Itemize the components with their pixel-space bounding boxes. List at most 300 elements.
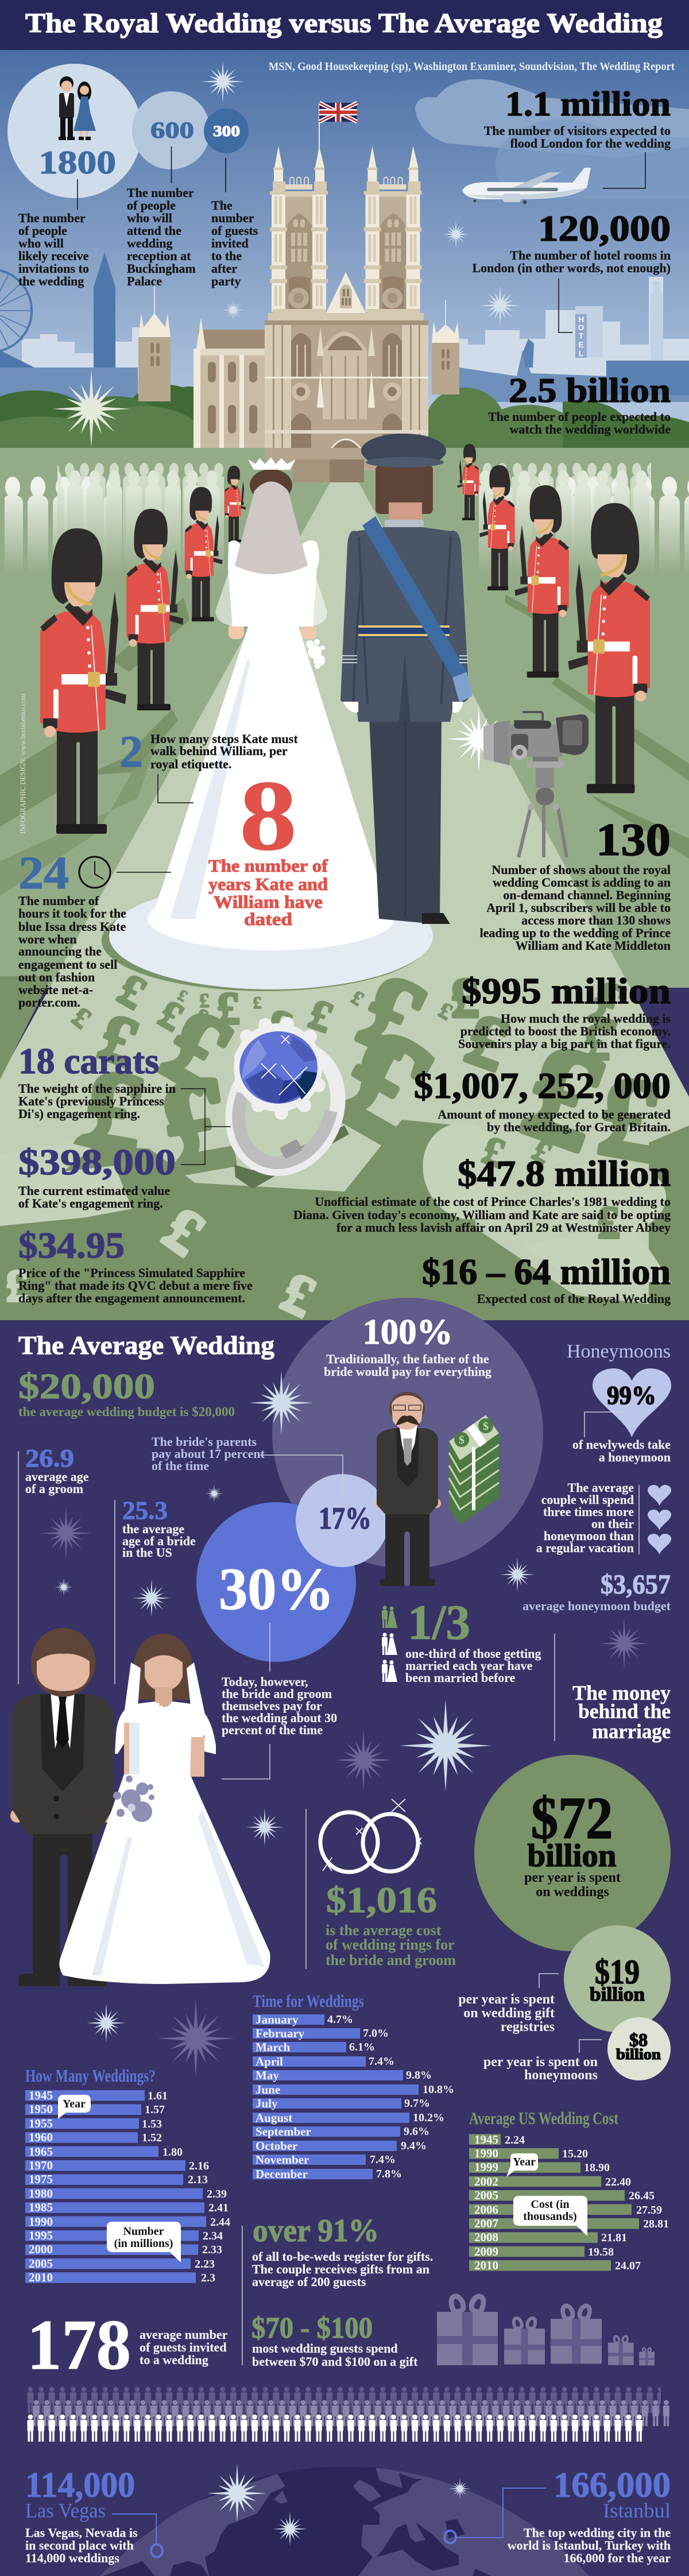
bar chart: average US wedding cost: 24.07 <box>615 2260 641 2272</box>
text: 8 years dated: dated <box>244 909 292 929</box>
bar chart: time for weddings: 6.1% <box>349 2041 375 2053</box>
title banner: The Royal Wedding versus The Average Wedding <box>25 8 663 38</box>
text: honeymoon budget <box>522 1569 671 1613</box>
panel: lower money pattern: £ <box>477 1128 510 1177</box>
callout line: $8 <box>579 2040 602 2053</box>
circle: 300 after party guests: 300 <box>213 123 240 140</box>
starburst over trees <box>52 370 130 448</box>
text: 24 hours: website net-a- <box>18 983 93 997</box>
bar chart: average US wedding cost: 21.81 <box>601 2231 627 2244</box>
panel: lower money pattern: £ <box>192 1004 212 1028</box>
icons: gift boxes <box>437 2296 655 2365</box>
text: Las Vegas: Las Vegas, Nevada is <box>25 2525 138 2540</box>
starbursts over globe <box>207 2463 471 2546</box>
bar chart: time for weddings: April <box>256 2055 283 2068</box>
text: 178 guests: 178 <box>27 2306 131 2384</box>
bar chart: time for weddings: October <box>256 2139 297 2153</box>
icon: HOTEL vertical sign: L <box>579 349 584 358</box>
text: Istanbul: Istanbul <box>603 2499 671 2522</box>
text: over 91 percent: over 91% <box>253 2213 379 2249</box>
text: 24 hours: out on fashion <box>18 970 95 984</box>
text: 2 steps behind: 2 <box>119 726 143 776</box>
text: 24 hours: The number of <box>18 894 99 908</box>
panel: lower money pattern: £ <box>343 950 443 1082</box>
text: 300 description: party <box>211 274 241 288</box>
bar chart: time for weddings: March <box>256 2040 291 2054</box>
heading: the average wedding: The Average Wedding <box>18 1330 274 1360</box>
pictogram: rows of guests <box>25 2387 672 2442</box>
text: 120,000 hotel rooms: London (in other words, not enough) <box>472 261 671 275</box>
text: 300 description: after <box>211 261 237 276</box>
divider: rings <box>305 1809 307 1969</box>
text: bride's parents 17 percent: pay about 17 percent <box>152 1446 265 1461</box>
bar chart: time for weddings: 9.4% <box>401 2140 427 2152</box>
circle: $72 billion <box>474 1755 671 1951</box>
bar chart: average US wedding cost: 2.24 <box>505 2134 525 2146</box>
text: 8 years dated: 8 <box>239 760 297 871</box>
text: $34.95: Price of the "Princess Simulated Sapphire <box>18 1266 245 1280</box>
text: 1800 description: The number <box>18 211 86 225</box>
text: $1,007,252,000: $1,007, 252, 000 <box>414 1065 671 1106</box>
text: 130 shows: William and Kate Middleton <box>516 938 671 953</box>
text: $70 - $100 gift <box>251 2312 418 2369</box>
text: $47.8 million: Unofficial estimate of the cost of Prince Charles's 1981 wedding to <box>315 1194 671 1209</box>
callout bubble: number in millions: (in millions) <box>114 2237 173 2250</box>
callout lines from circles <box>78 146 226 210</box>
text: bride age: 25.3 <box>122 1496 168 1525</box>
bar chart: how many weddings: 1.80 <box>162 2146 183 2159</box>
guard: left second <box>126 509 183 710</box>
bar chart: how many weddings: 1950 <box>29 2102 53 2116</box>
text: 100 percent: 100% <box>363 1313 452 1352</box>
callout line: $19 <box>539 1974 559 1988</box>
bar chart: average US wedding cost: Average US Wedding Cost <box>469 2108 619 2128</box>
bar chart: how many weddings: 1990 <box>29 2215 53 2229</box>
circle: $8 billion: billion <box>616 2046 661 2063</box>
guard: left third <box>185 487 223 621</box>
bar chart: how many weddings: How Many Weddings? <box>25 2066 156 2086</box>
text: 18 carats: The weight of the sapphire in <box>18 1081 176 1096</box>
text: 130 shows: April 1, subscribers will be able to <box>486 900 671 915</box>
text: over 91 percent <box>252 2213 433 2289</box>
text: 2.5 billion viewers: watch the wedding worldwide <box>509 422 671 436</box>
bar chart: time for weddings: January <box>256 2013 299 2026</box>
text: newlyweds: of newlyweds take <box>572 1437 671 1452</box>
text: couple pays 30 percent: Today, however, <box>222 1674 308 1689</box>
text: couple pays 30 percent: percent of the time <box>222 1723 323 1737</box>
panel: lower money pattern: £ <box>451 966 479 1030</box>
bar chart: how many weddings: 1995 <box>29 2229 53 2242</box>
icon: stack of money: $ <box>459 1434 465 1446</box>
text: 300 description: of guests <box>211 223 258 238</box>
panel: lower money pattern: £ <box>75 1045 154 1179</box>
text: 600 description: reception at <box>127 249 191 263</box>
text: gift registries <box>458 1992 555 2035</box>
bar chart: how many weddings: 2.16 <box>189 2160 209 2172</box>
callout bracket: ring <box>181 1089 231 1165</box>
bar chart: time for weddings: 7.4% <box>370 2153 396 2166</box>
text: honeymoon budget: average honeymoon budget <box>522 1599 671 1613</box>
illustration: groom from behind <box>340 434 473 924</box>
text: 2 steps behind <box>119 726 298 776</box>
text: 100 percent <box>324 1313 491 1379</box>
text: 18 carats: 18 carats <box>18 1041 159 1081</box>
panel: lower money pattern: £ <box>597 1198 620 1248</box>
bar chart: how many weddings: 1.61 <box>148 2090 168 2102</box>
panel: lower money pattern: £ <box>47 1108 129 1226</box>
circle: $72 billion: per year is spent <box>524 1870 621 1885</box>
panel: lower money pattern: £ <box>253 993 262 1012</box>
left side wing <box>193 318 265 450</box>
bar chart: average US wedding cost: 15.20 <box>562 2148 588 2160</box>
panel: lower money pattern: £ <box>110 964 154 1019</box>
credit: designer: INFOGRAPHIC DESIGN: www.borisbenko.com <box>18 694 27 834</box>
callout bubble: cost in thousands <box>513 2196 587 2236</box>
illustration: average bride <box>59 1634 270 1984</box>
text: gift registries: on wedding gift <box>463 2006 555 2021</box>
text: 100 percent: Traditionally, the father of the <box>326 1352 489 1366</box>
callout line: below 30 percent text <box>222 1744 270 1779</box>
icon: clock <box>79 857 110 888</box>
text: 24 hours: blue Issa dress Kate <box>18 919 126 934</box>
bar chart: average US wedding cost: 19.58 <box>588 2246 614 2258</box>
panel: lower money pattern: £ <box>506 1013 623 1180</box>
text: 24 hours: announcing the <box>18 944 102 958</box>
panel: lower money pattern: £ <box>144 985 251 1117</box>
heading: the money behind the marriage: marriage <box>592 1720 671 1743</box>
bar chart: how many weddings: 2.34 <box>203 2230 223 2242</box>
icon: bride's bouquet <box>113 1776 154 1822</box>
text: $70 - $100 gift: $70 - $100 <box>251 2312 373 2345</box>
text: 18 carats: Di's) engagement ring. <box>18 1107 140 1121</box>
bar chart: average US wedding cost: 2007 <box>474 2217 498 2230</box>
panel: lower money pattern: £ <box>6 1261 29 1312</box>
text: 2 steps behind: walk behind William, per <box>150 744 288 758</box>
title banner <box>0 0 689 50</box>
panel: lower money pattern: £ <box>585 1014 610 1071</box>
panel: lower money pattern: £ <box>311 995 458 1175</box>
circle: $72 billion: on weddings <box>536 1885 609 1900</box>
text: Istanbul: The top wedding city in the <box>524 2525 671 2540</box>
text: 1800 description: likely receive <box>18 249 89 263</box>
text: cost of rings: is the average cost <box>326 1922 442 1939</box>
marker: Las Vegas <box>112 2514 162 2557</box>
circle: $19 billion: billion <box>590 1984 645 2005</box>
text: $1,007,252,000: Amount of money expected to be generated <box>438 1107 671 1121</box>
text: 2.5 billion viewers: The number of people expected to <box>488 409 671 424</box>
bar chart: time for weddings: May <box>256 2068 279 2082</box>
text: honeymoons spend <box>483 2055 598 2083</box>
callout bubble: number in millions: Number <box>123 2225 164 2238</box>
text: 2 steps behind: How many steps Kate must <box>150 732 298 746</box>
text: 178 guests: average number <box>140 2327 228 2342</box>
panel: lower money pattern: £ <box>527 1132 558 1171</box>
text: 600 description: attend the <box>127 223 181 238</box>
bar chart: how many weddings: 2005 <box>29 2257 53 2271</box>
text: 130 shows: wedding Comcast is adding to an <box>493 875 671 889</box>
icon: HOTEL vertical sign: E <box>578 340 584 349</box>
text: 1800 description: who will <box>18 236 64 250</box>
circle: 600 reception guests <box>132 91 210 169</box>
bar chart: time for weddings: February <box>256 2026 305 2040</box>
guard: far right <box>457 444 479 520</box>
panel: lower money pattern: £ <box>303 990 339 1042</box>
bar chart: time for weddings: December <box>256 2167 308 2181</box>
text: 1.1 million visitors <box>484 85 671 150</box>
guard shadows <box>0 594 689 896</box>
bar chart: how many weddings: 2000 <box>29 2242 53 2256</box>
panel: sky and London skyline <box>0 50 689 458</box>
bar chart: time for weddings: June <box>256 2083 280 2097</box>
text: groom age <box>25 1444 89 1496</box>
text: 8 years dated: The number of <box>208 856 328 876</box>
text: 24 hours <box>18 848 126 1009</box>
bar chart: how many weddings: 1980 <box>29 2187 53 2200</box>
text: 2 steps behind: royal etiquette. <box>150 757 231 771</box>
text: bride age: age of a bride <box>122 1534 196 1548</box>
icon: bouquet <box>306 639 325 669</box>
text: 1.1 million visitors: flood London for the wedding <box>510 136 671 150</box>
panel: lower money pattern: £ <box>582 966 635 1043</box>
text: three times more: honeymoon than <box>544 1529 634 1543</box>
callout bubble: cost in thousands: Cost (in <box>531 2198 570 2211</box>
text: $995 million <box>458 970 671 1051</box>
text: 300 description: The <box>211 198 233 212</box>
text: 2.5 billion viewers <box>488 372 671 436</box>
bar chart: how many weddings: 2.23 <box>195 2258 215 2271</box>
circle: $8 billion <box>607 2017 671 2080</box>
text: $70 - $100 gift: between $70 and $100 on a gift <box>252 2354 418 2369</box>
text: gift registries: registries <box>501 2020 555 2035</box>
icon: HOTEL vertical sign: O <box>578 323 585 332</box>
panel: lower money pattern <box>0 950 689 1329</box>
bar chart: how many weddings: 1975 <box>29 2172 53 2186</box>
circle: 300 after party guests <box>204 109 249 153</box>
bar chart: average US wedding cost: 2006 <box>474 2203 498 2217</box>
bar chart: time for weddings: Time for Weddings <box>253 1991 364 2011</box>
text: 600 description: Buckingham <box>127 261 196 276</box>
text: 600 description: of people <box>127 198 176 212</box>
text: 24 hours: 24 <box>18 848 69 899</box>
text: one-third remarried: married each year have <box>405 1658 533 1673</box>
icon: HOTEL vertical sign: H <box>578 315 584 324</box>
bar chart: how many weddings: 2010 <box>29 2271 53 2284</box>
panel: lower money pattern: £ <box>151 992 191 1041</box>
bar chart: how many weddings: 1.53 <box>142 2118 162 2130</box>
guard: right second <box>514 485 569 678</box>
text: 300 description: to the <box>211 249 242 263</box>
text: three times more: three times more <box>543 1504 634 1519</box>
circle: 600 reception guests: 600 <box>150 117 194 143</box>
callout bubble: year: Year <box>63 2098 86 2110</box>
text: $20,000 budget: $20,000 <box>18 1367 155 1406</box>
panel: lower money pattern: £ <box>272 1260 325 1329</box>
text: 18 carats <box>18 1041 176 1121</box>
text: couple pays 30 percent: themselves pay for <box>222 1699 322 1713</box>
panel: lower money pattern: £ <box>151 1193 217 1269</box>
icons: small couples <box>382 1606 397 1682</box>
text: bride's parents 17 percent: of the time <box>152 1459 209 1473</box>
text: 130 shows: leading up to the wedding of Prince <box>480 926 671 940</box>
divider: three times <box>638 1485 640 1554</box>
text: three times more: a regular vacation <box>536 1541 634 1555</box>
icon: stack of money <box>449 1415 499 1525</box>
circle: 30 percent couple pays: 30% <box>219 1556 334 1622</box>
guard: left front <box>40 528 126 834</box>
text: Istanbul: 166,000 <box>553 2466 671 2505</box>
text: 1.1 million visitors: The number of visitors expected to <box>484 123 671 138</box>
illustration: globe <box>100 2467 589 2576</box>
callout bubble: year <box>58 2095 91 2119</box>
illustration: bride from behind <box>102 457 433 991</box>
icon: stack of money: $ <box>483 1420 489 1433</box>
text: 120,000 hotel rooms: The number of hotel rooms in <box>510 248 671 262</box>
bar chart: how many weddings: 2.41 <box>208 2202 229 2214</box>
text: 178 guests: to a wedding <box>140 2353 208 2367</box>
bar chart: how many weddings: 1985 <box>29 2200 53 2214</box>
text: 300 description: number <box>211 211 254 225</box>
text: Istanbul <box>508 2466 671 2565</box>
text: $47.8 million: for a much less lavish affair on April 29 at Westminster Abbey <box>336 1220 671 1235</box>
divider lines: ages <box>18 1451 115 1684</box>
text: $34.95: days after the engagement announcement. <box>18 1291 245 1305</box>
text: $70 - $100 gift: most wedding guests spend <box>252 2341 398 2355</box>
text: 130 shows: on-demand channel. Beginning <box>503 888 671 902</box>
left small tower <box>138 285 171 401</box>
illustration: father of the bride <box>374 1392 441 1586</box>
bar chart: average US wedding cost: 18.90 <box>584 2161 610 2174</box>
icon: TV camera on tripod <box>446 706 589 857</box>
bar chart: average US wedding cost: 1945 <box>474 2133 498 2146</box>
bar chart: average US wedding cost: 28.81 <box>643 2218 669 2230</box>
icon: HOTEL vertical sign: T <box>579 331 584 341</box>
circle: 17 percent parents pay <box>296 1474 389 1567</box>
callout line: plane <box>603 152 645 188</box>
bar chart: average US wedding cost: 1990 <box>474 2146 498 2160</box>
bar chart: time for weddings: 10.8% <box>423 2083 454 2096</box>
text: $47.8 million <box>293 1153 671 1235</box>
text: $398,000: $398,000 <box>18 1142 176 1182</box>
text: $34.95: Ring" that made its QVC debut a mere five <box>18 1278 253 1293</box>
panel: the average wedding background <box>0 1320 689 2576</box>
illustration: crowds <box>5 463 689 566</box>
text: 130 shows: Number of shows about the royal <box>491 862 671 877</box>
bar chart: how many weddings: 1945 <box>29 2088 53 2102</box>
text: 300 description: invited <box>211 236 249 250</box>
icon: wedding rings <box>320 1799 421 1872</box>
panel: lower money pattern: £ <box>260 999 299 1054</box>
panel: lower money pattern: £ <box>434 997 457 1025</box>
text: Las Vegas <box>25 2466 138 2565</box>
panel: lower money pattern: £ <box>175 987 191 1005</box>
circle: $72 billion: billion <box>527 1838 617 1874</box>
text: couple pays 30 percent: the wedding about 30 <box>222 1711 337 1725</box>
bar chart: time for weddings: 9.7% <box>404 2097 430 2110</box>
text: three times more: The average <box>568 1480 634 1495</box>
text: 100 percent: bride would pay for everything <box>324 1364 491 1379</box>
divider: gifts <box>242 2226 243 2365</box>
callout line: 30 percent <box>269 1623 270 1672</box>
text: newlyweds: a honeymoon <box>599 1450 671 1464</box>
text: $995 million: $995 million <box>462 970 671 1011</box>
marker: Istanbul <box>444 2488 546 2543</box>
bar chart: time for weddings: 10.2% <box>413 2111 444 2124</box>
text: 178 guests <box>27 2306 228 2384</box>
panel: lower money pattern: £ <box>456 997 519 1088</box>
guard: right front <box>568 503 650 793</box>
circle: 17 percent parents pay: 17% <box>319 1501 371 1535</box>
panel: lower money pattern: £ <box>152 1047 243 1202</box>
text: one-third remarried: been married before <box>405 1670 516 1685</box>
text: one-third remarried <box>405 1595 541 1685</box>
bar chart: how many weddings: 1970 <box>29 2159 53 2172</box>
callout line: 2 steps <box>158 774 193 803</box>
illustration: trees behind abbey <box>0 385 689 473</box>
text: Las Vegas: in second place with <box>25 2538 134 2552</box>
bar chart: time for weddings: 7.8% <box>376 2168 402 2180</box>
text: over 91 percent: average of 200 guests <box>252 2275 366 2289</box>
circle: 100 percent father <box>272 1298 543 1569</box>
bar chart: time for weddings: 7.0% <box>363 2027 389 2040</box>
bar chart: how many weddings: 2.33 <box>202 2244 222 2256</box>
text: 24 hours: wore when <box>18 932 77 946</box>
main facade <box>265 313 428 459</box>
bar chart: how many weddings: 2.3 <box>201 2272 215 2284</box>
bar chart: how many weddings: 1.57 <box>145 2103 165 2116</box>
text: 120,000 hotel rooms <box>472 208 671 275</box>
divider: money <box>554 1634 555 1741</box>
text: couple pays 30 percent: the bride and groom <box>222 1687 332 1701</box>
bar chart: time for weddings: 9.6% <box>404 2125 429 2138</box>
text: 600 description: The number <box>127 185 194 200</box>
text: Las Vegas: 114,000 <box>25 2466 135 2505</box>
illustration: Westminster Abbey <box>138 146 459 459</box>
panel: lower money pattern: £ <box>217 984 240 1034</box>
text: 24 hours: engagement to sell <box>18 957 117 972</box>
text: 1.1 million visitors: 1.1 million <box>505 85 671 123</box>
text: 1800 description: of people <box>18 223 67 238</box>
bar chart: time for weddings: 4.7% <box>327 2013 353 2026</box>
sky starbursts <box>202 60 521 326</box>
text: $1,007,252,000 <box>414 1065 671 1134</box>
text: one-third remarried: 1/3 <box>408 1595 470 1650</box>
panel: lower money pattern: £ <box>591 1051 669 1186</box>
section starbursts <box>40 1371 649 2078</box>
bar chart: how many weddings: 1960 <box>29 2130 53 2144</box>
text: newlyweds <box>572 1437 671 1464</box>
text: 600 description: Palace <box>127 274 162 288</box>
text: over 91 percent: of all to-be-weds register for gifts. <box>252 2249 433 2264</box>
callout bubble: cost in thousands: thousands) <box>523 2210 577 2223</box>
text: cost of rings <box>326 1879 456 1968</box>
text: cost of rings: the bride and groom <box>326 1952 456 1968</box>
text: $995 million: Souvenirs play a big part in that figure. <box>458 1036 671 1051</box>
text: $995 million: How much the royal wedding is <box>501 1011 671 1026</box>
heading: the money behind the marriage <box>572 1681 671 1743</box>
icon: HOTEL vertical sign <box>575 314 587 358</box>
text: $20,000 budget: the average wedding budget is $20,000 <box>18 1405 235 1419</box>
callout bubble: cost year <box>506 2153 538 2177</box>
text: three times more <box>536 1480 634 1555</box>
bar chart: average US wedding cost: 2009 <box>474 2245 498 2258</box>
callout line: clock <box>117 872 171 873</box>
bar chart: average US wedding cost: 27.59 <box>636 2204 662 2217</box>
text: $47.8 million: Diana. Given today's economy, William and Kate are said to be opting <box>293 1208 671 1222</box>
panel: lower money pattern: £ <box>90 998 148 1081</box>
heading: the money behind the marriage: behind the <box>578 1700 671 1723</box>
heading: honeymoons: Honeymoons <box>567 1341 671 1362</box>
panel: lower money pattern: £ <box>347 986 368 1010</box>
